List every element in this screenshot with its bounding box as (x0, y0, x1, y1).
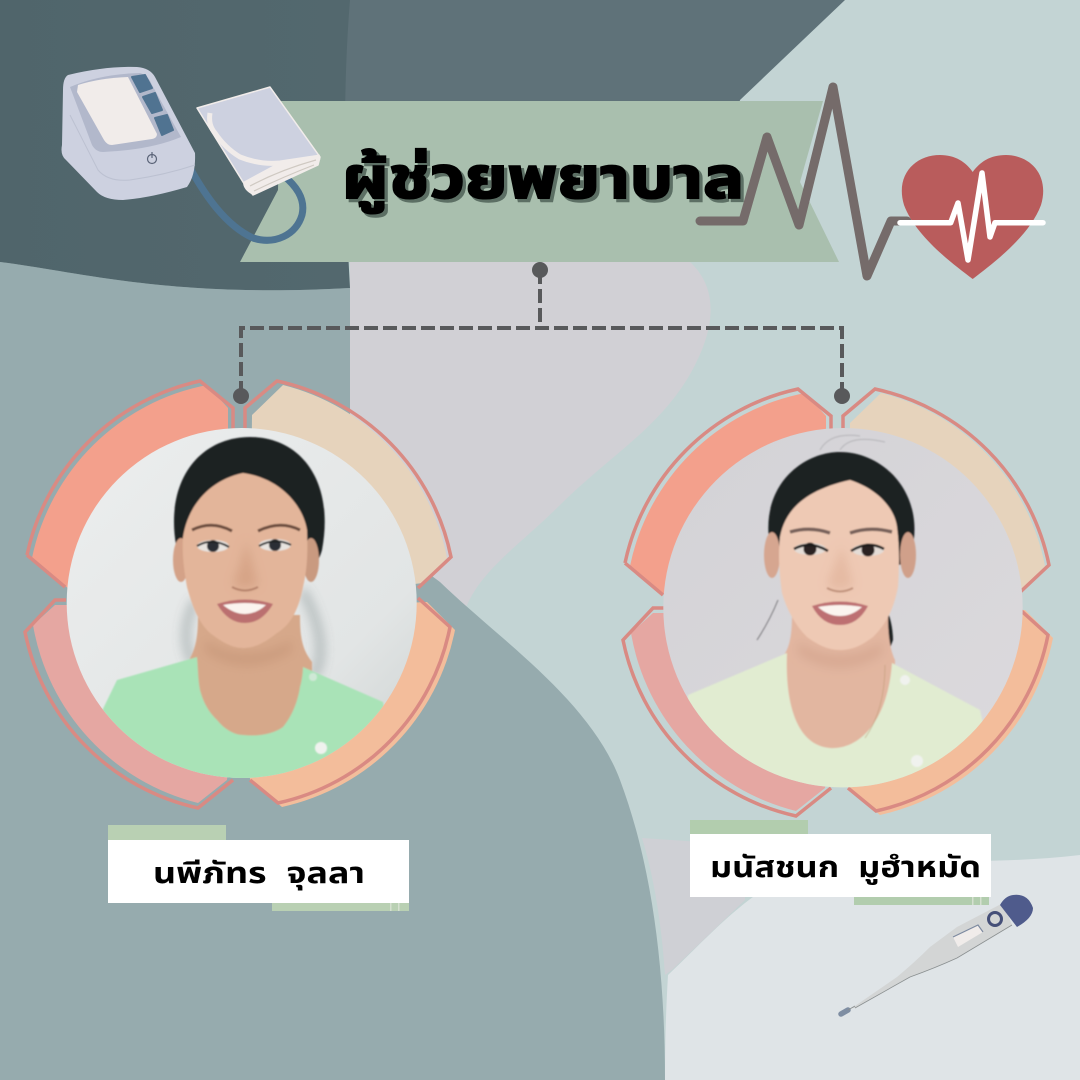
text: ผู้ช่วยพยาบาล (342, 146, 744, 214)
icon: thermometer (841, 895, 1033, 1014)
label: left name: นพีภัทร จุลลา (153, 858, 365, 890)
icon: heart with pulse (900, 155, 1043, 279)
label: right name: มนัสชนก มูฮำหมัด (710, 852, 981, 885)
label: left name (108, 825, 409, 911)
connector: dashed org lines (233, 262, 850, 404)
panel: left ring (25, 381, 455, 808)
icon: blood pressure cuff (197, 87, 320, 195)
title: ผู้ช่วยพยาบาล (345, 149, 747, 217)
panel: right ring (623, 389, 1053, 816)
photo: right portrait (660, 425, 1030, 800)
icon: blood pressure monitor (62, 67, 303, 240)
banner (240, 101, 839, 262)
photo: left portrait (66, 428, 417, 778)
icon: heartbeat line (700, 87, 907, 276)
label: right name (690, 820, 991, 905)
